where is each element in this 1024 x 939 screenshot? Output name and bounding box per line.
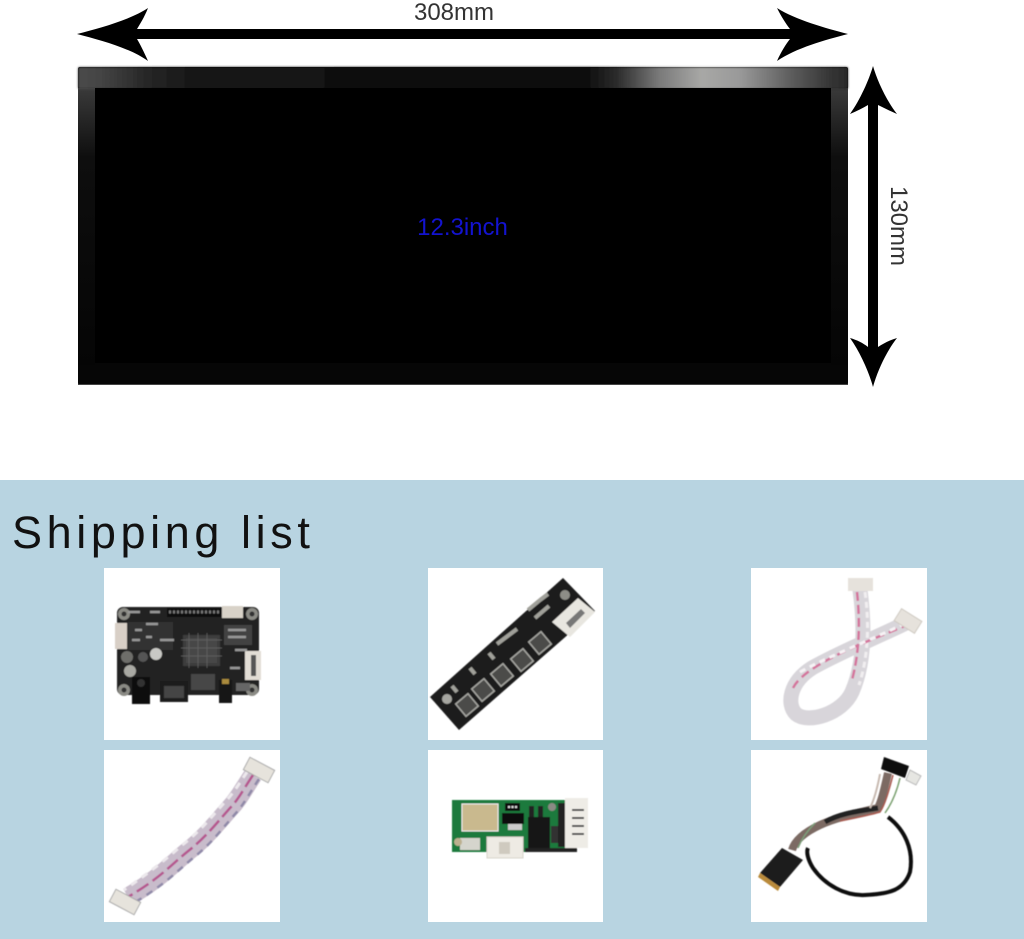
item: ribbon cable long: [751, 568, 927, 740]
item: LVDS cable: [751, 750, 927, 922]
arrow: width 308mm: [77, 8, 848, 61]
item: controller board: [104, 568, 280, 740]
item: power adapter board: [428, 750, 603, 922]
item: ribbon cable short: [104, 750, 280, 922]
item: key board: [428, 568, 603, 740]
heading: Shipping list: [12, 507, 314, 558]
LCD screen: [78, 67, 848, 385]
label: screen size: 12.3inch: [417, 214, 508, 241]
panel: shipping list: [0, 480, 1024, 939]
label: height: 130mm: [885, 186, 912, 266]
panel: display dimensions: [77, 0, 912, 387]
arrow: height 130mm: [850, 66, 897, 387]
